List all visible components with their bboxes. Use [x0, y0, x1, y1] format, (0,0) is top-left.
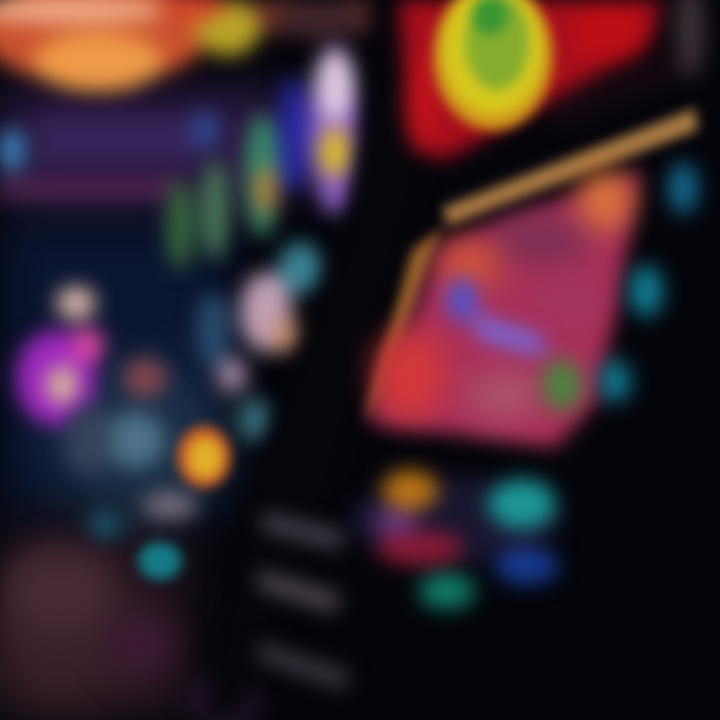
- slot column: pink and teal lights: [196, 242, 322, 442]
- machine: gold trim bar: [365, 108, 698, 420]
- ceiling: orange dome lights: [0, 0, 370, 92]
- cluster: round gray-blue reels: [66, 358, 198, 539]
- light: teal lamp: [138, 542, 182, 580]
- machine top: yellow and green ring: [433, 0, 553, 130]
- screen: purple figure: [446, 278, 550, 358]
- light: orange-yellow lamp: [177, 426, 231, 488]
- screen: green patch: [542, 359, 582, 411]
- floor: patterned carpet: [5, 545, 253, 720]
- machine: main screen: [368, 170, 640, 448]
- side lights: teal column: [599, 162, 698, 403]
- cabinet: gray drawer stripes: [258, 512, 350, 690]
- background: left room haze: [0, 90, 290, 720]
- ceiling: purple band: [0, 110, 221, 198]
- machine cabinet: dark divider: [200, 0, 425, 720]
- button panel: colored buttons: [350, 470, 560, 609]
- slot column: distant screens: [166, 45, 361, 270]
- magenta glow: [16, 286, 104, 426]
- screen: color patches: [374, 170, 631, 421]
- machine top: red panel: [398, 0, 704, 160]
